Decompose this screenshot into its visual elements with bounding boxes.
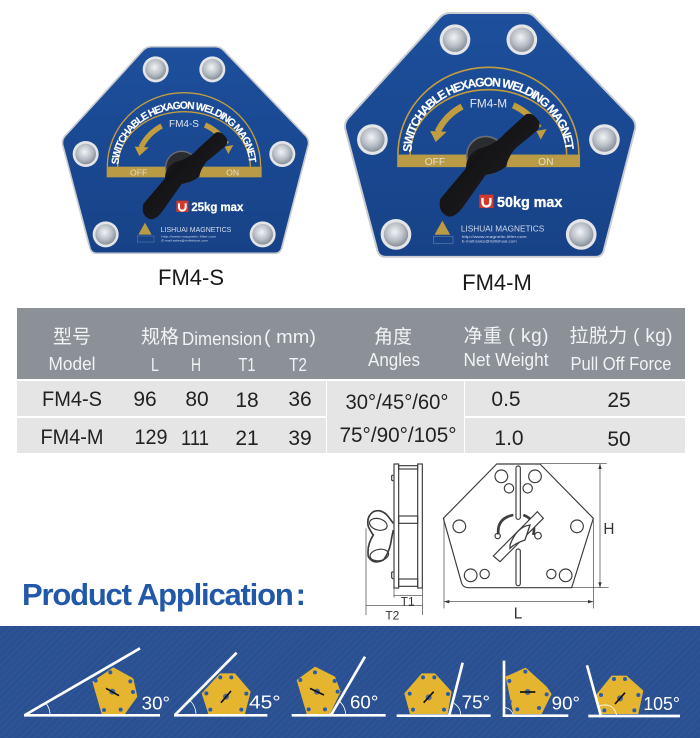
90 degree application: [503, 661, 580, 717]
product: FM4-S magnet: E-mail:sales@rizilishuai.com: [161, 238, 209, 242]
30 degree application: 30°: [142, 692, 170, 713]
75 degree application: 75°: [462, 691, 490, 712]
specification table: 净重 ( kg): [464, 325, 548, 347]
specification table: 25: [607, 389, 631, 412]
product: FM4-S magnet: FM4-S: [169, 119, 199, 130]
specification table: 80: [185, 388, 209, 411]
product: FM4-S magnet: http://www.magnetic-lifter.com: [161, 234, 217, 238]
90 degree application: 90°: [552, 692, 580, 713]
dimension lines: [366, 464, 609, 615]
specification table: H: [191, 355, 201, 375]
product: FM4-M magnet: SWITCHABLE HEXAGON WELDING MAGNET: [403, 78, 574, 152]
product: FM4-M magnet: 50kg max: [497, 195, 562, 211]
75 degree application: [397, 663, 491, 716]
45 degree application: [174, 653, 281, 715]
product: FM4-S magnet: OFF: [130, 167, 147, 177]
specification table: 39: [288, 427, 312, 450]
specification table: 36: [288, 388, 312, 411]
specification table: 75°/90°/105°: [340, 424, 456, 447]
specification table: FM4-M: [40, 426, 104, 449]
product: FM4-M magnet: http://www.magnetic-lifter.com: [462, 235, 527, 239]
product: FM4-S magnet: 25kg max: [191, 200, 243, 214]
product: FM4-M magnet: FM4-M: [470, 98, 507, 111]
specification table: 30°/45°/60°: [346, 391, 448, 414]
specification table: 129: [134, 426, 168, 449]
specification table: T1: [238, 355, 256, 375]
specification table: Dimension: [182, 329, 262, 349]
product: FM4-S magnet: ON: [226, 167, 239, 177]
specification table: 111: [181, 427, 209, 450]
side view: [368, 464, 422, 588]
specification table: Angles: [368, 350, 420, 370]
technical drawing: side and front views with dimensions: [366, 464, 614, 623]
technical drawing: side and front views with dimensions: H: [603, 521, 614, 538]
technical drawing: side and front views with dimensions: T2: [385, 608, 400, 622]
specification table: 角度: [374, 326, 412, 348]
product: FM4-S magnet: SWITCHABLE HEXAGON WELDING MAGNET: [112, 101, 256, 164]
specification table: 规格: [141, 326, 179, 348]
specification table: 96: [133, 388, 157, 411]
specification table: 1.0: [494, 427, 524, 450]
product: FM4-M magnet: E-mail:sales@rizilishuai.com: [462, 240, 517, 244]
product: FM4-M magnet: ON: [538, 157, 553, 168]
product: FM4-M magnet: LISHUAI MAGNETICS: [461, 225, 545, 234]
specification table: 21: [235, 427, 259, 450]
label: FM4-M: FM4-M: [462, 270, 532, 295]
60 degree application: [292, 657, 386, 715]
60 degree application: 60°: [350, 692, 378, 713]
product: FM4-M magnet: OFF: [425, 157, 445, 168]
specification table: 50: [607, 428, 631, 451]
specification table: L: [151, 355, 159, 375]
technical drawing: side and front views with dimensions: L: [514, 606, 523, 623]
specification table: 型号: [53, 326, 91, 348]
specification table: [17, 308, 685, 453]
specification table: T2: [289, 355, 307, 375]
banner: application angles: [0, 626, 700, 738]
specification table: 0.5: [491, 388, 521, 411]
product: FM4-S magnet: [62, 46, 310, 254]
30 degree application: [24, 648, 170, 715]
specification table: Pull Off Force: [570, 354, 672, 374]
specification table: 18: [235, 389, 259, 412]
specification table: FM4-S: [42, 388, 102, 411]
specification table: 拉脱力 ( kg): [570, 325, 672, 347]
specification table: Model: [48, 354, 96, 374]
45 degree application: 45°: [249, 692, 281, 713]
105 degree application: [587, 665, 680, 716]
product: FM4-M magnet: [344, 12, 636, 258]
technical drawing: side and front views with dimensions: T1: [401, 594, 415, 608]
product: FM4-S magnet: LISHUAI MAGNETICS: [161, 227, 232, 234]
label: FM4-S: FM4-S: [158, 265, 224, 290]
105 degree application: 105°: [643, 693, 680, 714]
specification table: Net Weight: [464, 350, 548, 370]
front view: [443, 464, 593, 588]
specification table: ( mm): [264, 327, 316, 347]
heading: Product Application: Product Application:: [22, 577, 305, 612]
